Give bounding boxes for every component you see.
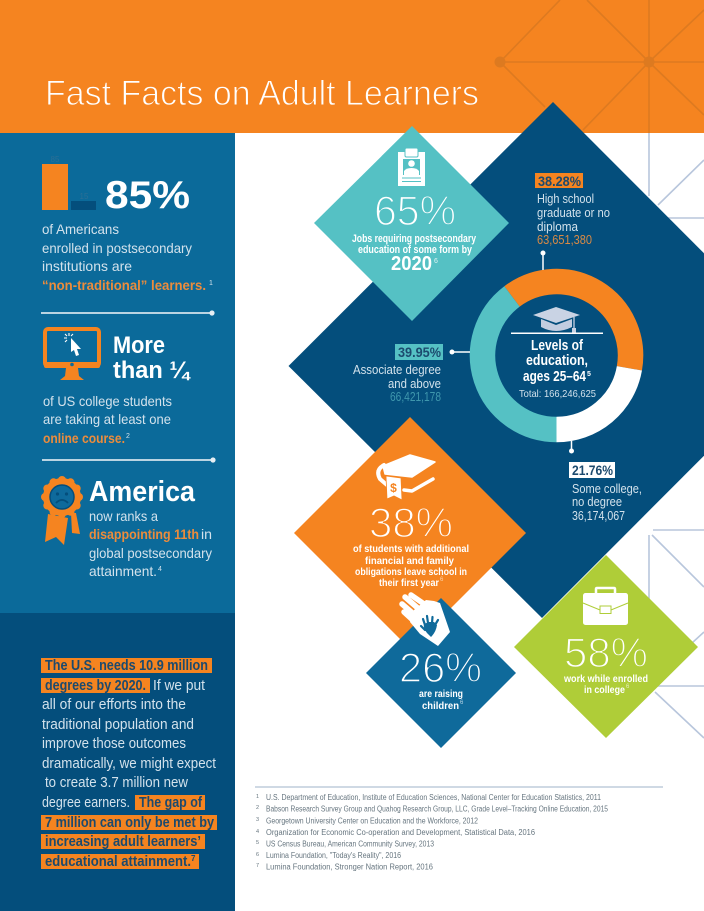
footnotes: 2: [256, 805, 259, 811]
callout text: 7 million can only be met by: [45, 815, 214, 831]
divider: [41, 310, 215, 316]
footnotes: Georgetown University Center on Education and the Workforce, 2012: [266, 816, 478, 826]
footnotes: Organization for Economic Co-operation and Development, Statistical Data, 2016: [266, 828, 536, 837]
icon: briefcase: [583, 588, 628, 625]
panel: blue diamond 26%: [366, 595, 516, 748]
label: 39.95% associate degree: 66,421,178: [390, 389, 441, 404]
label: 38.28% high school: 63,651,380: [537, 232, 592, 247]
heading: more than a quarter: than ¼: [113, 357, 191, 384]
label: 21.76% some college: 21.76%: [572, 463, 613, 478]
icon: computer monitor: [44, 329, 100, 380]
heading: more than a quarter: More: [113, 332, 165, 359]
icon: adult and child hands: [402, 595, 450, 646]
text: jobs requiring postsecondary: education of some form by: [358, 244, 473, 256]
text: work while enrolled: [563, 673, 648, 696]
text: jobs requiring postsecondary: Jobs requiring postsecondary: [352, 233, 477, 245]
icon: book with dollar bookmark: $: [390, 481, 397, 495]
callout text: dramatically, we might expect: [42, 756, 216, 772]
bar chart: 85 vs 15: [42, 155, 96, 210]
text: global ranking: global postsecondary: [89, 545, 212, 561]
text: additional obligations: obligations leave school in: [355, 566, 467, 578]
callout text: to create 3.7 million new: [45, 775, 188, 791]
bar chart: 85 vs 15: 15: [80, 192, 89, 201]
highlight bars: [41, 658, 217, 869]
text: global ranking: disappointing 11th: [89, 526, 199, 542]
stat: 85%: 85%: [105, 174, 190, 217]
callout text: educational attainment.: [45, 854, 191, 870]
panel: orange diamond 38%: [294, 417, 526, 649]
donut centre label: 5: [587, 371, 591, 378]
footnotes: 4: [256, 829, 259, 835]
panel: green diamond 58%: [514, 555, 698, 738]
donut centre label: ages 25–64: [523, 369, 586, 385]
footnotes: 5: [256, 840, 259, 846]
callout text: 7: [191, 854, 196, 863]
callout text: degrees by 2020.: [45, 678, 146, 694]
text: are raising children: are raising: [419, 688, 463, 700]
text: online course: 2: [126, 433, 130, 440]
donut chart: levels of education: [483, 282, 631, 430]
panel: teal diamond 65%: [314, 126, 509, 321]
stat: 26%: 26%: [399, 644, 482, 691]
donut centre label: Levels of: [531, 338, 583, 354]
text: global ranking: 4: [158, 566, 162, 573]
footnotes: US Census Bureau, American Community Survey, 2013: [266, 840, 434, 848]
donut centre label: education,: [526, 353, 588, 369]
panel: sidebar statistics: [0, 133, 235, 613]
label: 38.28% high school: High school: [537, 191, 594, 206]
text: jobs requiring postsecondary: 6: [434, 258, 438, 265]
donut centre label: [519, 338, 596, 400]
text: non-traditional learners: of Americans: [42, 221, 119, 237]
label: 39.95% associate degree: 39.95%: [398, 345, 441, 360]
text: are raising children: 6: [460, 700, 464, 706]
text: are raising children: [419, 688, 464, 712]
footnotes: Lumina Foundation, Stronger Nation Report, 2016: [266, 862, 434, 872]
footnotes: Babson Research Survey Group and Quahog Research Group, LLC, Grade Level–Tracking Online Education, 2015: [266, 804, 608, 814]
text: additional obligations: their first year: [379, 577, 439, 589]
text: additional obligations: [353, 543, 469, 589]
callout text: traditional population and: [42, 717, 194, 733]
text: online course: of US college students: [43, 393, 172, 409]
text: jobs requiring postsecondary: [352, 233, 477, 275]
stat: 38%: 38%: [369, 499, 453, 546]
icon: graduation cap: [511, 307, 603, 334]
header band: [0, 0, 704, 133]
bar chart: 85 vs 15: 85: [51, 155, 60, 164]
text: online course: [43, 393, 172, 446]
text: work while enrolled: work while enrolled: [563, 673, 648, 685]
label: 38.28% high school: 38.28%: [538, 174, 581, 189]
label: 38.28% high school: diploma: [537, 219, 579, 234]
background line pattern: [649, 133, 704, 738]
text: non-traditional learners: institutions are: [42, 258, 132, 274]
stat: 58%: 58%: [564, 629, 648, 676]
footnotes: 7: [256, 863, 259, 869]
heading: America: America: [89, 476, 196, 508]
footnotes: [255, 786, 663, 872]
text: non-traditional learners: 1: [209, 280, 213, 287]
label: 39.95% associate degree: Associate degree: [353, 362, 441, 377]
callout text: improve those outcomes: [42, 736, 186, 752]
donut centre label: Total: 166,246,625: [519, 388, 596, 400]
callout text: The U.S. needs 10.9 million: [45, 658, 208, 674]
text: global ranking: in: [201, 526, 212, 542]
text: jobs requiring postsecondary: 2020: [391, 253, 432, 275]
text: global ranking: now ranks a: [89, 508, 158, 524]
label: 39.95% associate degree: [353, 344, 470, 404]
text: global ranking: [89, 508, 212, 579]
title: Fast Facts on Adult Learners: [45, 74, 479, 113]
icon: ribbon with sad face: [41, 476, 83, 545]
text: non-traditional learners: “non-traditional” learners.: [42, 277, 206, 293]
label: 39.95% associate degree: and above: [388, 376, 441, 391]
label: 21.76% some college: 36,174,067: [572, 508, 625, 523]
callout text: If we put: [153, 678, 205, 694]
text: additional obligations: financial and family: [365, 555, 454, 567]
text: non-traditional learners: enrolled in postsecondary: [42, 240, 192, 256]
footnotes: U.S. Department of Education, Institute of Education Sciences, National Center for Education Statistics, 2011: [266, 793, 601, 802]
label: 21.76% some college: Some college,: [572, 481, 642, 496]
text: work while enrolled: in college: [584, 684, 625, 696]
footnotes: 1: [256, 794, 259, 800]
label: 38.28% high school: [535, 173, 610, 270]
callout text: all of our efforts into the: [42, 697, 186, 713]
label: 38.28% high school: graduate or no: [537, 205, 610, 220]
callout text: increasing adult learners’: [45, 834, 201, 850]
footnotes: Lumina Foundation, "Today's Reality", 2016: [266, 851, 401, 860]
label: 21.76% some college: no degree: [572, 494, 622, 509]
panel: degree gap callout: [0, 613, 235, 911]
footnotes: 6: [256, 852, 259, 858]
text: non-traditional learners: [42, 221, 213, 293]
callout text: The gap of: [139, 795, 202, 811]
text: online course: online course.: [43, 430, 125, 446]
panel: large navy diamond with donut: [288, 102, 704, 618]
text: additional obligations: 6: [440, 577, 444, 583]
text: additional obligations: of students with additional: [353, 543, 469, 555]
text: online course: are taking at least one: [43, 411, 171, 427]
stat: 65%: 65%: [374, 187, 456, 234]
text: are raising children: children: [422, 700, 459, 712]
callout text: degree earners.: [42, 795, 130, 811]
icon: book with dollar bookmark: [378, 455, 435, 500]
label: 21.76% some college: [569, 441, 642, 523]
divider: [42, 457, 216, 463]
text: work while enrolled: 6: [626, 684, 630, 690]
icon: ID badge: [398, 148, 425, 186]
text: global ranking: attainment.: [89, 563, 157, 579]
callout text: [42, 658, 216, 870]
heading: more than a quarter: [113, 332, 191, 384]
footnotes: 3: [256, 817, 259, 823]
